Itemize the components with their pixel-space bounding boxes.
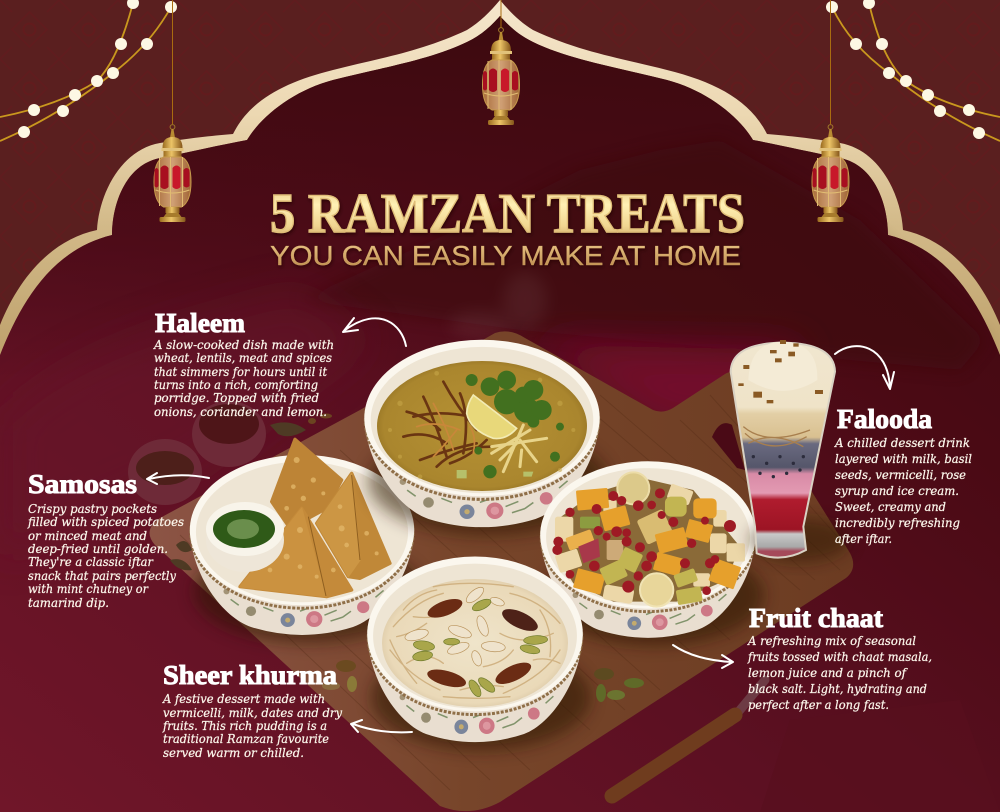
arrow: Samosas <box>147 473 209 484</box>
description: Fruit chaat: fruits tossed with chaat masala, <box>747 650 932 664</box>
lantern: right <box>812 0 849 222</box>
callout: Samosas: Samosas <box>28 469 137 499</box>
callout: Haleem <box>153 308 334 419</box>
food: haleem toppings <box>388 371 575 479</box>
callout: Sheer khurma: Sheer khurma <box>163 660 338 690</box>
description: Haleem: that simmers for hours until it <box>154 365 327 379</box>
bowl: fruit chaat <box>540 461 764 646</box>
wooden serving board <box>150 331 853 811</box>
description: Samosas: tamarind dip. <box>28 596 109 610</box>
description: Samosas: snack that pairs perfectly <box>28 569 176 583</box>
description: Samosas: or minced meat and <box>28 529 147 543</box>
description: Haleem: porridge. Topped with fried <box>154 391 319 405</box>
callout: Haleem: Haleem <box>155 308 246 338</box>
title: 5 RAMZAN TREATS <box>270 183 745 245</box>
callout: Fruit chaat <box>747 603 932 712</box>
description: Falooda <box>834 436 972 546</box>
lantern: center <box>482 0 520 125</box>
description: Sheer khurma: fruits. This rich pudding is a <box>162 719 327 733</box>
description: Falooda: syrup and ice cream. <box>835 484 959 498</box>
description: Samosas <box>27 502 184 610</box>
description: Falooda: incredibly refreshing <box>835 516 960 530</box>
arrow: Haleem <box>343 318 406 346</box>
description: Falooda: A chilled dessert drink <box>834 436 970 450</box>
description: Haleem: turns into a rich, comforting <box>154 378 318 392</box>
bowl: haleem <box>364 340 608 535</box>
description: Sheer khurma: A festive dessert made with <box>162 692 325 706</box>
steam over haleem <box>450 272 547 339</box>
description: Fruit chaat: lemon juice and a pinch of <box>748 666 909 680</box>
description: Fruit chaat: A refreshing mix of seasonal <box>747 634 916 648</box>
arrow: Fruit chaat <box>673 645 733 668</box>
subtitle: YOU CAN EASILY MAKE AT HOME <box>270 240 741 271</box>
food: fruit pieces <box>552 472 745 607</box>
description: Sheer khurma: traditional Ramzan favourite <box>163 732 329 746</box>
description: Sheer khurma <box>162 692 342 760</box>
scattered nuts <box>322 660 644 702</box>
description: Haleem: wheat, lentils, meat and spices <box>154 351 332 365</box>
description: Falooda: seeds, vermicelli, rose <box>835 468 966 482</box>
green chutney cup <box>206 502 284 572</box>
description: Haleem: onions, coriander and lemon. <box>154 405 327 419</box>
arrow: Sheer khurma <box>351 720 412 732</box>
description: Sheer khurma: served warm or chilled. <box>163 746 304 760</box>
lights: right strings <box>826 0 1000 141</box>
food: vermicelli, dates, nuts <box>390 583 560 699</box>
bowl: samosas <box>190 439 422 643</box>
description: Samosas: deep-fried until golden. <box>28 542 168 556</box>
spoon and napkin <box>612 680 1000 812</box>
callout: Falooda: Falooda <box>837 404 933 434</box>
lights: left strings <box>0 0 177 141</box>
description: Samosas: Crispy pastry pockets <box>28 502 157 516</box>
callout: Falooda <box>834 404 972 546</box>
small sauce bowls and leaves <box>128 401 332 570</box>
callout: Samosas <box>27 469 184 610</box>
description: Samosas: filled with spiced potatoes <box>27 515 184 529</box>
bowl: sheer khurma <box>367 556 591 750</box>
description: Falooda: layered with milk, basil <box>835 452 972 466</box>
description: Fruit chaat: black salt. Light, hydrating and <box>748 682 927 696</box>
description: Falooda: Sweet, creamy and <box>835 500 946 514</box>
description: Samosas: with mint chutney or <box>28 582 149 596</box>
description: Haleem: A slow-cooked dish made with <box>153 338 334 352</box>
description: Haleem <box>153 338 334 419</box>
description: Fruit chaat <box>747 634 932 712</box>
lantern: left <box>154 0 191 222</box>
callout: Fruit chaat: Fruit chaat <box>749 603 883 633</box>
falooda glass <box>731 340 850 562</box>
arrow: Falooda <box>835 346 894 389</box>
title <box>270 183 745 271</box>
description: Falooda: after iftar. <box>835 532 892 546</box>
description: Sheer khurma: vermicelli, milk, dates and dry <box>163 706 342 720</box>
description: Fruit chaat: perfect after a long fast. <box>748 698 889 712</box>
description: Samosas: They're a classic iftar <box>28 555 154 569</box>
samosa pieces <box>240 439 390 597</box>
callout: Sheer khurma <box>162 660 342 760</box>
